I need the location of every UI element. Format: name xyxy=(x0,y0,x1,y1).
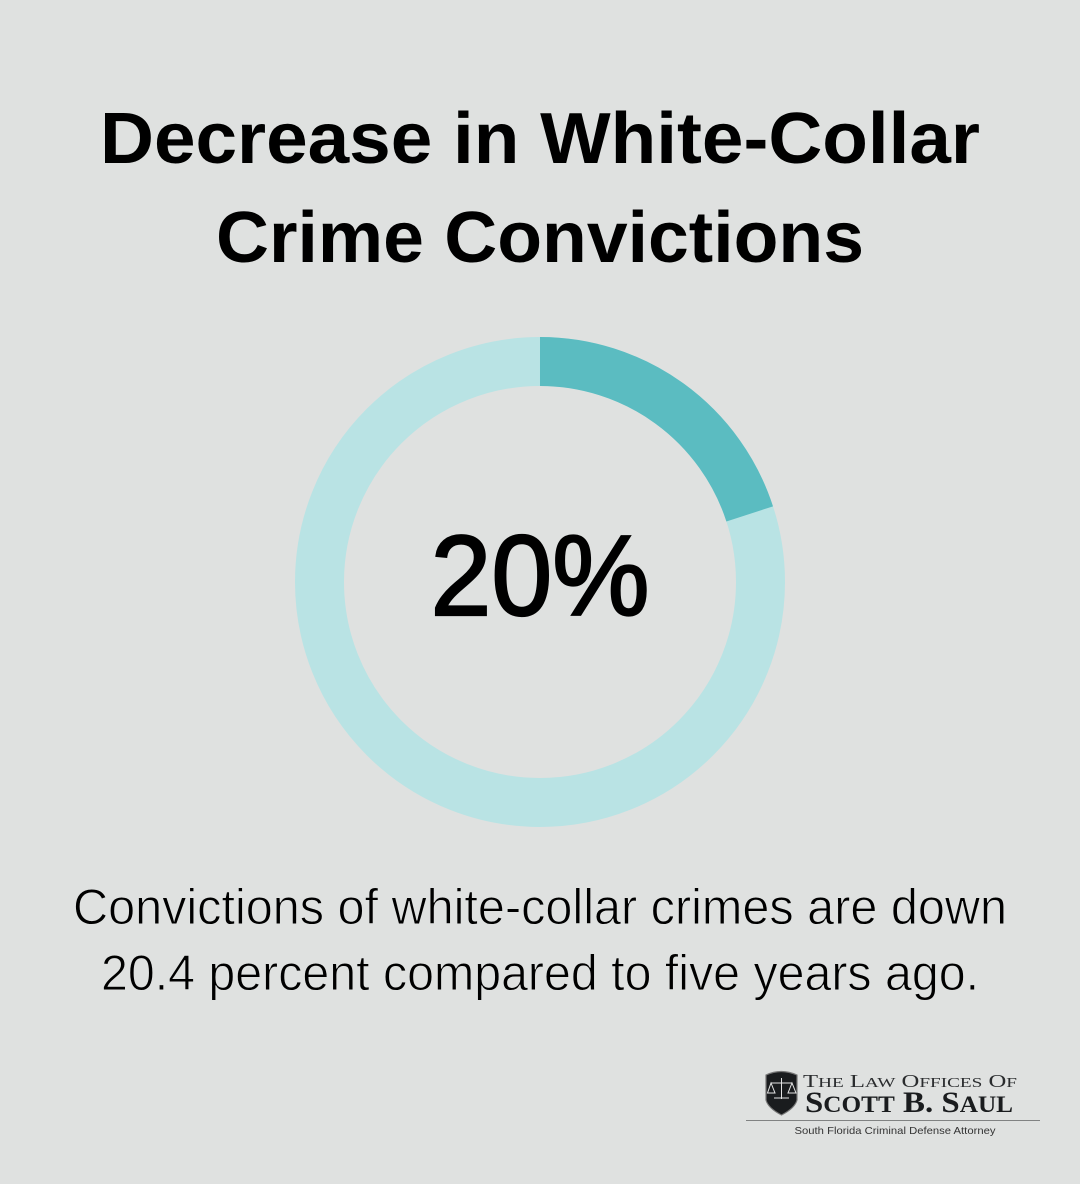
description text xyxy=(73,879,1007,1001)
law firm logo xyxy=(746,1071,1040,1137)
logo firm name xyxy=(803,1071,1017,1119)
title: Crime Convictions xyxy=(216,198,864,278)
logo firm name: SCOTT B. SAUL xyxy=(805,1086,1013,1119)
icon: shield with scales xyxy=(766,1072,797,1115)
description text: 20.4 percent compared to five years ago. xyxy=(101,945,979,1001)
logo divider xyxy=(746,1120,1040,1121)
title xyxy=(100,99,980,278)
logo tagline: South Florida Criminal Defense Attorney xyxy=(794,1125,996,1137)
donut chart: 20 percent xyxy=(320,362,760,802)
logo firm name: T HE L AW O FFICES O F xyxy=(803,1071,1017,1091)
center value: 20% xyxy=(430,513,650,640)
description text: Convictions of white-collar crimes are down xyxy=(73,879,1007,935)
title: Decrease in White-Collar xyxy=(100,99,980,179)
